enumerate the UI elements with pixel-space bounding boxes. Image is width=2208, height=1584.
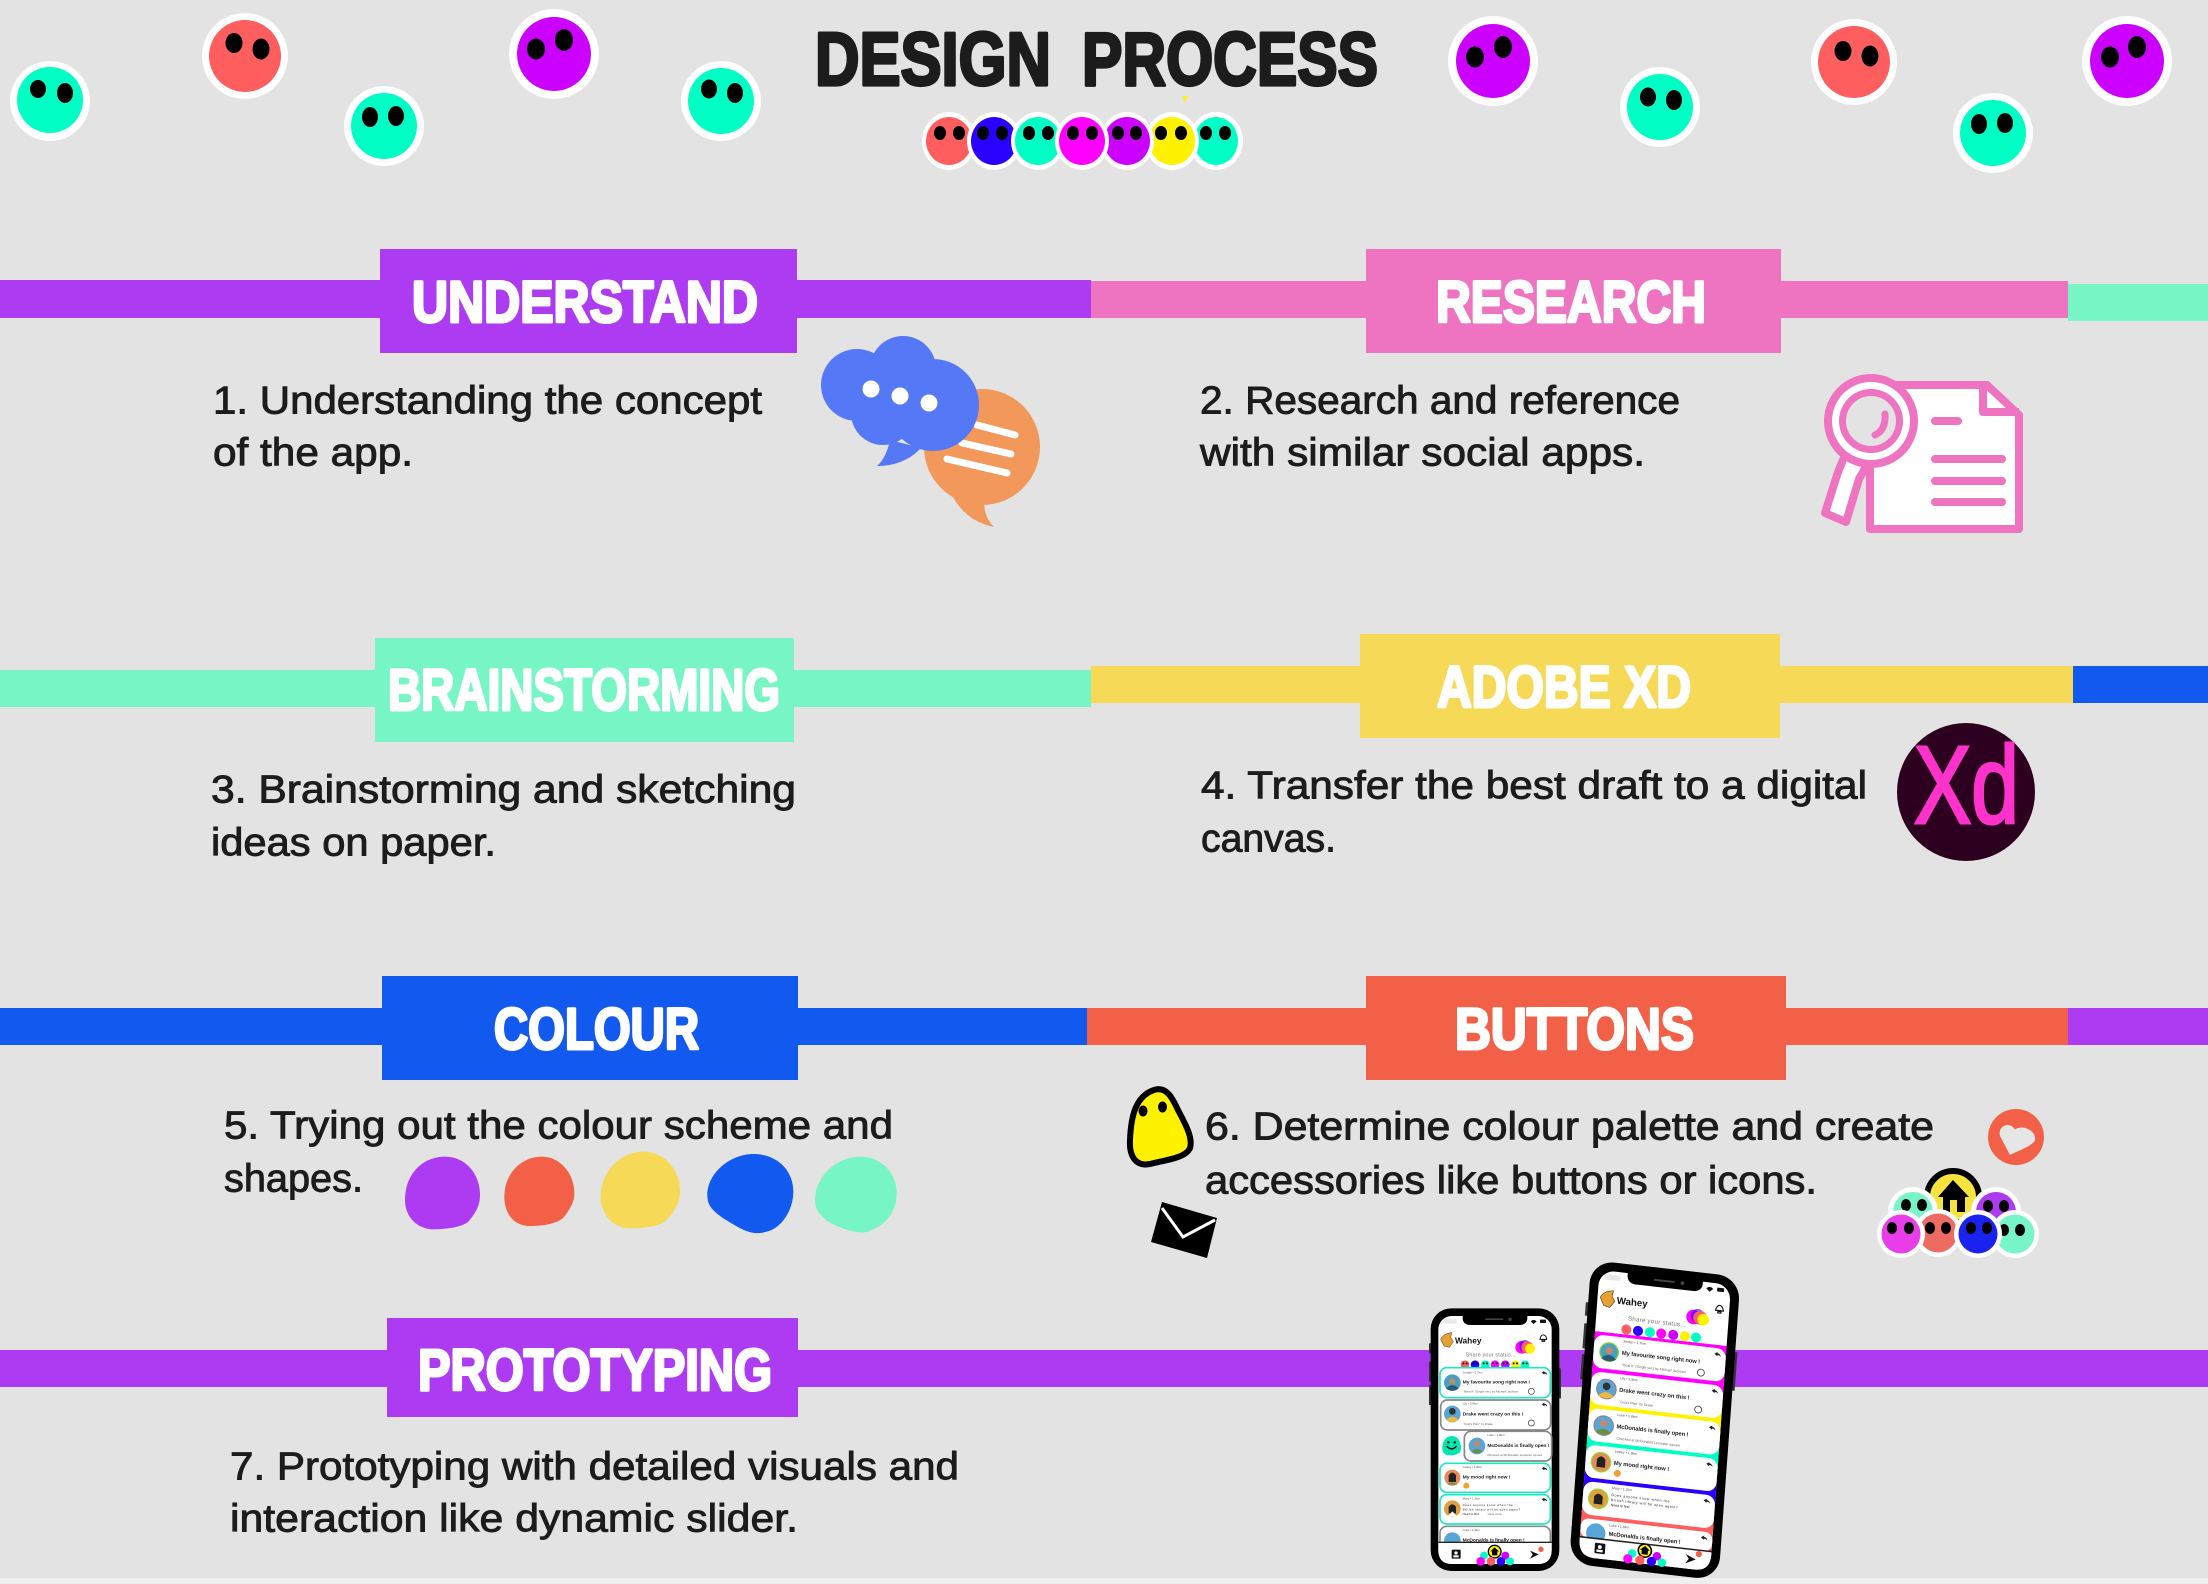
- icon: face cluster with home button: [1877, 1171, 2039, 1258]
- phone: left mockup: Does anyone know when the: [1463, 1503, 1513, 1507]
- phone: right mockup: Luke • 1.8km: [1617, 1413, 1638, 1419]
- phone: right mockup: Jordan • 1.7km: [1623, 1339, 1646, 1346]
- phone: right mockup: Share your status...: [1628, 1315, 1687, 1329]
- text: step 6: 6. Determine colour palette and create: [1205, 1106, 1934, 1148]
- phone: left mockup: British library will be open again?: [1463, 1507, 1520, 1511]
- icon: title face row: [922, 96, 1243, 170]
- phone: left mockup: Wahey: [1455, 1335, 1482, 1345]
- heading: understand: UNDERSTAND: [412, 270, 758, 335]
- phone: right mockup: Lesley • 1.8km: [1615, 1450, 1637, 1456]
- text: step 3: ideas on paper.: [211, 822, 496, 864]
- title: PROCESS: [1082, 17, 1378, 101]
- heading: buttons: [1366, 976, 1786, 1080]
- panel: colour: [0, 976, 1087, 1233]
- phone: left mockup: Jordan • 1.7km: [1463, 1371, 1483, 1375]
- phone: right mockup: Mary • 1.2km: [1612, 1486, 1632, 1492]
- text: step 7: interaction like dynamic slider.: [230, 1498, 798, 1540]
- heading: colour: COLOUR: [494, 997, 699, 1062]
- text: step 2: 2. Research and reference: [1200, 380, 1680, 422]
- phone: left mockup: McDonalds is finally open !: [1463, 1537, 1525, 1543]
- panel: buttons: [1087, 976, 2208, 1258]
- title: [815, 17, 1378, 101]
- phone: left mockup: View more: [1488, 1512, 1502, 1516]
- text: step 1: [213, 380, 762, 474]
- phone: right mockup: "Beat It" (Single ver.) by Michael Jackson: [1622, 1363, 1686, 1374]
- icon: red face: [1811, 19, 1897, 105]
- icon: envelope: [1151, 1202, 1217, 1258]
- phone: right mockup: My mood right now !: [1614, 1461, 1669, 1473]
- phone: right mockup: British library will be open again?: [1611, 1498, 1678, 1510]
- text: step 6: [1205, 1106, 1934, 1202]
- phone: right mockup: Does anyone know when the: [1611, 1493, 1670, 1504]
- panel: understand: [0, 249, 1091, 527]
- phone: left mockup: Need to find: [1463, 1512, 1479, 1516]
- icon: teal face: [681, 61, 761, 141]
- text: step 6: accessories like buttons or icons.: [1205, 1160, 1817, 1202]
- chart: colour swatches: [405, 1152, 897, 1233]
- heading: brainstorming: [375, 638, 794, 742]
- heading: buttons: BUTTONS: [1455, 997, 1694, 1062]
- icon: yellow ghost: [1130, 1089, 1191, 1164]
- icon: heart button: [1988, 1109, 2044, 1165]
- icon: document with magnifier: [1824, 374, 2019, 529]
- phone: right mockup: "God's Plan" by Drake: [1619, 1400, 1653, 1408]
- phone: right mockup: Wahey: [1616, 1296, 1649, 1310]
- text: step 1: of the app.: [213, 432, 413, 474]
- heading: research: RESEARCH: [1436, 270, 1706, 335]
- panel: brainstorming: [0, 638, 1091, 864]
- phone: right mockup: McDonalds is finally open !: [1616, 1424, 1689, 1438]
- phone: right mockup: Luke • 1.8km: [1609, 1523, 1630, 1530]
- icon: teal face: [344, 86, 424, 166]
- phone: right mockup: Drake went crazy on this !: [1619, 1388, 1690, 1402]
- phone: left mockup: [1429, 1308, 1561, 1571]
- panel: prototyping: [0, 1260, 2208, 1581]
- phone: left mockup: "Beat It" (Single ver.) by Michael Jackson: [1463, 1390, 1519, 1394]
- icon: teal face: [1953, 93, 2033, 173]
- phone: right mockup: [1567, 1260, 1743, 1581]
- phone: left mockup: Checked at McDonalds Leicester square: [1487, 1453, 1543, 1457]
- icon: purple face: [2082, 16, 2172, 106]
- phone: left mockup: Share your status...: [1466, 1353, 1516, 1359]
- heading: adobe xd: ADOBE XD: [1437, 655, 1691, 720]
- phone: left mockup: Drake went crazy on this !: [1463, 1412, 1524, 1418]
- phone: left mockup: Mary • 1.2km: [1463, 1496, 1481, 1500]
- phone: left mockup: Luke • 1.8km: [1487, 1433, 1505, 1437]
- phone: right mockup: Lily • 3.8km: [1620, 1376, 1638, 1382]
- text: step 7: 7. Prototyping with detailed visuals and: [230, 1446, 959, 1488]
- heading: brainstorming: BRAINSTORMING: [388, 658, 780, 723]
- heading: adobe xd: [1360, 634, 1780, 738]
- phone: right mockup: McDonalds is finally open !: [1608, 1532, 1681, 1546]
- text: step 5: 5. Trying out the colour scheme and: [224, 1104, 893, 1148]
- heading: understand: [380, 249, 797, 353]
- text: step 3: [211, 768, 796, 864]
- icon: teal face: [10, 61, 90, 141]
- phone: left mockup: My favourite song right now !: [1463, 1380, 1530, 1386]
- phone: left mockup: Luke • 1.8km: [1463, 1528, 1480, 1532]
- text: step 4: canvas.: [1201, 818, 1336, 860]
- text: step 7: [230, 1446, 959, 1540]
- icon: adobe xd logo: Xd: [1914, 724, 2019, 847]
- panel: research: [1091, 249, 2208, 529]
- text: step 2: with similar social apps.: [1199, 432, 1645, 474]
- panel: adobe xd: [1091, 634, 2208, 861]
- icon: speech bubbles: [821, 336, 1040, 527]
- text: step 5: [224, 1104, 893, 1200]
- phone: right mockup: Checked at McDonalds Leicester square: [1616, 1437, 1680, 1448]
- text: step 1: 1. Understanding the concept: [213, 380, 762, 422]
- phone: left mockup: Lily • 3.8km: [1463, 1402, 1478, 1406]
- text: step 2: [1199, 380, 1680, 474]
- phone: right mockup: My favourite song right now !: [1622, 1351, 1700, 1366]
- text: step 4: 4. Transfer the best draft to a digital: [1201, 764, 1867, 808]
- phone: left mockup: McDonalds is finally open !: [1487, 1443, 1550, 1449]
- text: step 5: shapes.: [224, 1158, 363, 1200]
- title: DESIGN: [815, 17, 1051, 101]
- text: step 3: 3. Brainstorming and sketching: [211, 768, 796, 812]
- icon: purple face: [1448, 16, 1538, 106]
- text: step 4: [1201, 764, 1867, 860]
- heading: prototyping: [387, 1318, 798, 1417]
- phone: left mockup: My mood right now !: [1463, 1475, 1511, 1481]
- heading: research: [1366, 249, 1781, 353]
- heading: prototyping: PROTOTYPING: [418, 1338, 772, 1403]
- phone: right mockup: Need to find: [1611, 1503, 1630, 1509]
- icon: purple face: [509, 9, 599, 99]
- icon: red face: [202, 13, 288, 99]
- heading: colour: [382, 976, 798, 1080]
- icon: teal face: [1620, 67, 1700, 147]
- phone: left mockup: Lesley • 1.8km: [1463, 1465, 1483, 1469]
- phone: left mockup: "God's Plan" by Drake: [1463, 1422, 1493, 1426]
